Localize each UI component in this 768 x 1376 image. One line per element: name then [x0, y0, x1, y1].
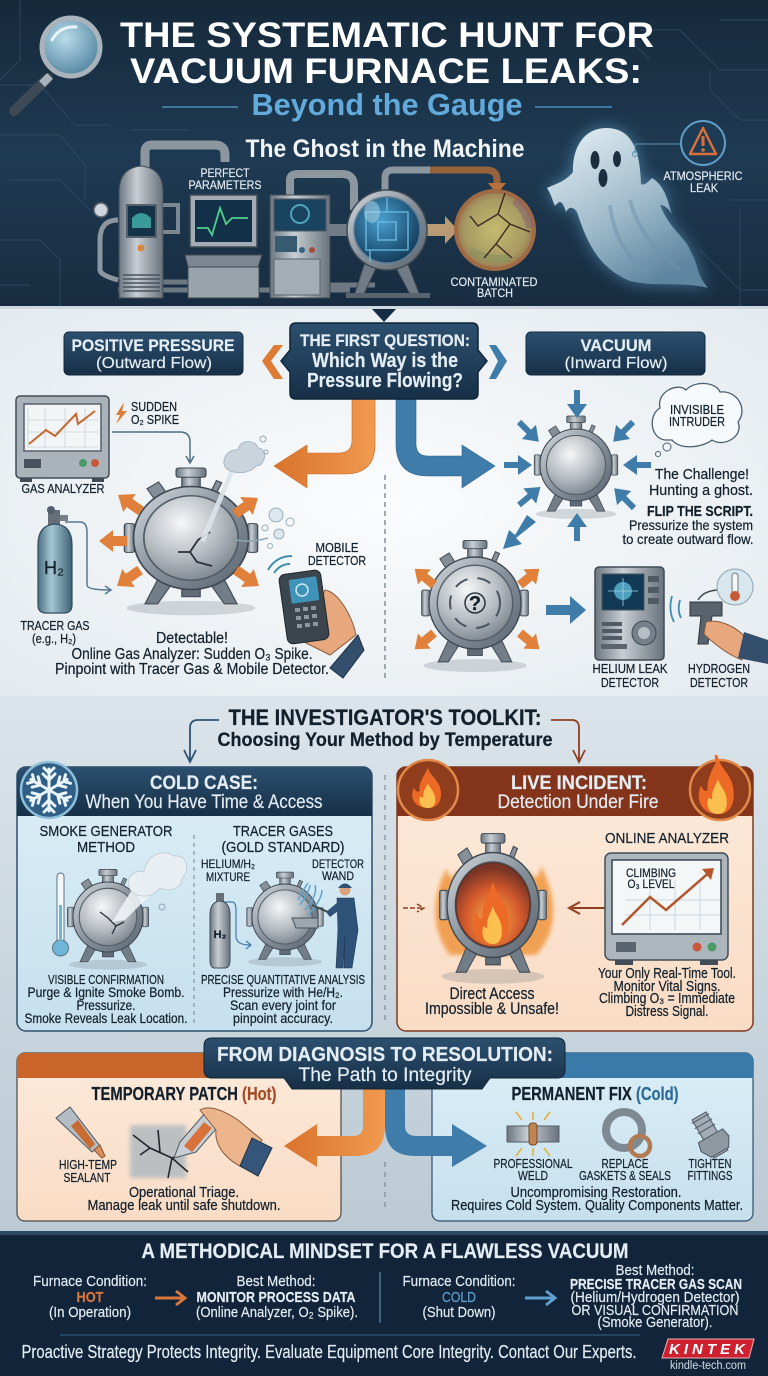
heading: permanent fix: PERMANENT FIX (Cold) [512, 1084, 678, 1104]
text block: hot condition: Furnace Condition: [33, 1273, 147, 1290]
icon: gasket [606, 1112, 650, 1156]
illustration: online analyzer monitor: O₃ LEVEL [628, 877, 675, 891]
subheading: smoke generator method: METHOD [77, 839, 135, 856]
illustration: leaking furnace [124, 436, 294, 615]
panel: header [0, 0, 768, 310]
callout: invisible intruder cloud: INTRUDER [669, 415, 725, 429]
illustration: furnace under vacuum [534, 416, 618, 519]
subtitle: Beyond the Gauge [252, 87, 522, 122]
label: mobile detector: MOBILE [316, 541, 358, 555]
text block: real-time tool: Climbing O₃ = Immediate [599, 991, 735, 1007]
label: helium leak detector: HELIUM LEAK [592, 662, 668, 676]
text block: detectable: Online Gas Analyzer: Sudden O₃ Spike. [72, 646, 312, 663]
arrow: analyzer to furnace [569, 902, 605, 914]
title: THE SYSTEMATIC HUNT FOR [120, 16, 654, 55]
illustration: pressurized furnace: ? [469, 593, 481, 615]
label: contaminated batch: CONTAMINATED [450, 275, 538, 289]
heading: cold case: When You Have Time & Access [86, 792, 322, 813]
text block: hot best method: MONITOR PROCESS DATA [196, 1289, 356, 1306]
illustration: pressurized furnace [422, 540, 528, 672]
heading: investigator's toolkit [218, 705, 552, 751]
label: mobile detector [308, 541, 366, 568]
heading: online analyzer: ONLINE ANALYZER [605, 830, 729, 847]
label: gaskets and seals: GASKETS & SEALS [579, 1169, 671, 1183]
heading: cold case [86, 773, 322, 813]
icon: mobile detector in hand [268, 556, 364, 678]
text block: visible confirmation: VISIBLE CONFIRMATION [48, 973, 164, 987]
text block: direct access: Impossible & Unsafe! [425, 999, 559, 1018]
label: perfect parameters: PARAMETERS [188, 178, 262, 192]
callout: the first question: THE FIRST QUESTION: [300, 331, 470, 350]
label: tighten fittings: FITTINGS [688, 1169, 732, 1183]
arrow: cold to method [525, 1291, 555, 1305]
arrow: blue flow to vacuum [396, 398, 495, 488]
text block: operational triage [88, 1185, 280, 1214]
label: sudden O2 spike [131, 400, 179, 427]
arrows: inward flow [504, 390, 651, 541]
arrow: blue to permanent fix [385, 1089, 487, 1167]
heading: investigator's toolkit: Choosing Your Method by Temperature [218, 730, 552, 751]
heading: from diagnosis to resolution [204, 1038, 565, 1089]
icon: bolt [685, 1108, 735, 1162]
label: high-temp sealant: SEALANT [64, 1171, 111, 1185]
text block: visible confirmation [24, 973, 188, 1026]
heading: live incident [498, 773, 658, 813]
text block: hot best method: Best Method: [236, 1273, 316, 1290]
callout: the first question: Pressure Flowing? [307, 370, 463, 392]
heading: investigator's toolkit: THE INVESTIGATOR'S TOOLKIT: [228, 705, 542, 730]
logo: kintek: KINTEK [669, 1341, 746, 1358]
label: atmospheric leak [664, 169, 743, 195]
label: detector wand [312, 857, 364, 883]
text block: cold best method: (Helium/Hydrogen Detector) [570, 1289, 740, 1306]
text block: hot best method: (Online Analyzer, O₂ Spike). [196, 1304, 358, 1321]
text block: precise quantitative analysis: pinpoint accuracy. [233, 1010, 333, 1026]
icon: right flame badge [690, 755, 750, 820]
illustration: online analyzer monitor [605, 853, 728, 965]
label: helium leak detector [592, 662, 668, 690]
text block: flip the script [622, 466, 754, 547]
text block: detectable [55, 630, 329, 678]
text block: flip the script: The Challenge! [655, 466, 749, 483]
text block: detectable: Pinpoint with Tracer Gas & Mobile Detector. [55, 661, 329, 678]
panel: live incident [397, 755, 753, 1031]
illustration: hydrogen detector gun [670, 569, 768, 664]
label: gaskets and seals: REPLACE [602, 1157, 648, 1171]
label: detector wand: DETECTOR [312, 857, 364, 871]
label: high-temp sealant [59, 1158, 117, 1185]
label: tighten fittings: TIGHTEN [688, 1157, 732, 1171]
text block: cold condition: COLD [442, 1289, 476, 1306]
heading: live incident: Detection Under Fire [498, 792, 658, 813]
label: contaminated batch [450, 275, 538, 300]
text block: operational triage: Manage leak until safe shutdown. [88, 1198, 280, 1214]
arrow: vacuum furnace to pressurized furnace [503, 515, 536, 549]
icon: magnifying glass [14, 18, 100, 111]
subheading: tracer gases: (GOLD STANDARD) [222, 839, 345, 856]
heading: live incident: LIVE INCIDENT: [511, 773, 647, 794]
callout: the first question: Which Way is the [312, 350, 458, 372]
arrow: to cold case [184, 720, 219, 762]
text block: cold condition: (Shut Down) [422, 1304, 496, 1321]
heading: from diagnosis to resolution: The Path to Integrity [298, 1065, 472, 1086]
illustration: furnace machinery [94, 145, 506, 298]
callout: the first question [281, 323, 487, 399]
text block: cold condition: Furnace Condition: [402, 1273, 516, 1290]
text block: flip the script: to create outward flow. [622, 531, 754, 547]
label box: vacuum: (Inward Flow) [564, 355, 668, 372]
text block: cold best method: OR VISUAL CONFIRMATION [572, 1302, 738, 1319]
illustration: tracer gas cylinder: H₂ [44, 558, 64, 578]
icon: lightning bolt [116, 402, 127, 424]
label: perfect parameters [188, 166, 262, 192]
icon: snowflake [21, 762, 77, 818]
arrow: orange chevron [262, 345, 283, 379]
text block: real-time tool [598, 966, 736, 1020]
text block: direct access [425, 984, 559, 1018]
text block: visible confirmation: Smoke Reveals Leak Location. [24, 1010, 188, 1026]
text block: operational triage: Operational Triage. [129, 1185, 239, 1201]
label: sudden O2 spike: SUDDEN [131, 400, 177, 414]
arrow: orange flow to positive pressure [274, 398, 375, 488]
illustration: furnace on fire [435, 834, 553, 984]
text block: precise quantitative analysis: PRECISE QUANTITATIVE ANALYSIS [201, 973, 365, 987]
icon: left flame badge [398, 760, 458, 820]
text block: uncompromising restoration [451, 1185, 743, 1214]
label: hydrogen detector: HYDROGEN [688, 662, 750, 676]
label: tracer gas: (e.g., H₂) [32, 632, 76, 646]
label: gas analyzer: GAS ANALYZER [22, 482, 104, 496]
label box: vacuum: VACUUM [580, 336, 652, 355]
label: gaskets and seals [579, 1157, 671, 1183]
label: professional weld: WELD [518, 1169, 548, 1183]
label: hydrogen detector [688, 662, 750, 690]
text block: real-time tool: Monitor Vital Signs. [614, 979, 720, 995]
title [120, 16, 654, 91]
arrow: hot to method [155, 1291, 185, 1305]
text block: hot best method [196, 1273, 358, 1321]
logo: kintek: kindle-tech.com [670, 1360, 746, 1372]
heading: cold case: COLD CASE: [150, 773, 258, 794]
illustration: contaminated batch disc [456, 191, 534, 269]
heading: from diagnosis to resolution: FROM DIAGNOSIS TO RESOLUTION: [217, 1044, 553, 1066]
heading: temporary patch: TEMPORARY PATCH (Hot) [92, 1084, 276, 1104]
label: mobile detector: DETECTOR [308, 554, 366, 568]
text block: visible confirmation: Pressurize. [76, 997, 136, 1013]
illustration: ghost [547, 128, 708, 288]
label box: vacuum [526, 332, 705, 375]
illustration: helium leak detector [595, 567, 664, 660]
text block: precise quantitative analysis: Scan every joint for [230, 997, 336, 1013]
label: perfect parameters: PERFECT [200, 166, 250, 180]
label: hydrogen detector: DETECTOR [690, 676, 748, 690]
label: tracer gas [20, 619, 90, 646]
text block: direct access: Direct Access [450, 984, 534, 1003]
arrow: to live incident [551, 720, 585, 762]
text block: cold best method: (Smoke Generator). [598, 1314, 712, 1331]
text block: precise quantitative analysis: Pressurize with He/H₂. [223, 984, 343, 1000]
label: helium leak detector: DETECTOR [601, 676, 659, 690]
text block: flip the script: Pressurize the system [629, 517, 753, 533]
arrow: blocked access [403, 904, 424, 912]
text block: hot condition: HOT [76, 1289, 104, 1306]
label: tracer gas: TRACER GAS [20, 619, 90, 633]
label box: positive pressure [64, 332, 243, 375]
text block: visible confirmation: Purge & Ignite Smoke Bomb. [28, 984, 184, 1000]
panel: cold case [17, 762, 372, 1031]
label: high-temp sealant: HIGH-TEMP [59, 1158, 117, 1172]
text block: precise quantitative analysis [201, 973, 365, 1026]
subheading: tracer gases: TRACER GASES [233, 823, 333, 840]
label: atmospheric leak: LEAK [690, 181, 718, 195]
label: helium/H2 mixture: MIXTURE [206, 870, 250, 884]
text block: call to action: Proactive Strategy Protects Integrity. Evaluate Equipment Core Integrity. Contact Our Experts. [22, 1342, 636, 1362]
callout: invisible intruder cloud [652, 383, 742, 456]
label: helium/H2 mixture [201, 857, 255, 884]
illustration: tracer gas furnace with technician: H₂ [214, 929, 227, 941]
label: helium/H2 mixture: HELIUM/H₂ [201, 857, 255, 871]
illustration: gas analyzer [16, 396, 109, 482]
label box: positive pressure: (Outward Flow) [96, 355, 212, 372]
panel: the investigator's toolkit [0, 696, 768, 1231]
label: detector wand: WAND [322, 869, 354, 883]
icon: warning badge [632, 121, 725, 165]
callout: invisible intruder cloud: INVISIBLE [670, 403, 724, 417]
label: atmospheric leak: ATMOSPHERIC [664, 169, 743, 183]
subheading: smoke generator method: SMOKE GENERATOR [40, 823, 173, 840]
arrows: outward flow [99, 486, 265, 595]
arrow: analyzer to furnace [112, 432, 194, 463]
text block: real-time tool: Your Only Real-Time Tool. [598, 966, 736, 982]
label: tighten fittings [688, 1157, 732, 1183]
illustration: online analyzer monitor: CLIMBING [626, 866, 676, 880]
label box: positive pressure: POSITIVE PRESSURE [72, 336, 234, 355]
subheading: tracer gases [222, 823, 345, 856]
text block: hot condition: (In Operation) [49, 1304, 131, 1321]
heading: the ghost in the machine: The Ghost in the Machine [246, 135, 525, 163]
label: contaminated batch: BATCH [477, 286, 513, 300]
label: professional weld: PROFESSIONAL [494, 1157, 573, 1171]
text block: cold best method: Best Method: [616, 1262, 694, 1279]
text block: cold condition [402, 1273, 516, 1321]
illustration: crack and sealant application [130, 1108, 272, 1178]
illustration: smoke test furnace [52, 853, 187, 970]
text block: uncompromising restoration: Uncompromising Restoration. [510, 1185, 682, 1201]
text block: real-time tool: Distress Signal. [626, 1004, 708, 1020]
text block: flip the script: Hunting a ghost. [649, 482, 753, 499]
logo: kintek [662, 1339, 754, 1372]
subheading: smoke generator method [40, 823, 173, 856]
text block: cold best method [570, 1262, 742, 1331]
panel: methodical mindset footer [0, 1231, 768, 1376]
label: professional weld [494, 1157, 573, 1183]
label: sudden O2 spike: O₂ SPIKE [131, 413, 179, 427]
panel: permanent fix [432, 1053, 753, 1221]
text block: hot condition [33, 1273, 147, 1321]
illustration: tracer gas furnace with technician [210, 872, 358, 968]
arrow: orange to temporary patch [284, 1089, 385, 1167]
icon: sealant tube [56, 1107, 105, 1158]
panel: temporary patch [17, 1053, 341, 1221]
arrow: to detectors [546, 596, 586, 624]
icon: weld [507, 1112, 559, 1156]
illustration: tracer gas cylinder [38, 506, 111, 613]
title: VACUUM FURNACE LEAKS: [130, 52, 642, 91]
panel: the first question [0, 306, 768, 698]
arrows: pressurized outward flow [408, 561, 546, 657]
text block: detectable: Detectable! [156, 630, 228, 647]
arrow: blue chevron [489, 345, 507, 379]
heading: methodical mindset: A METHODICAL MINDSET FOR A FLAWLESS VACUUM [142, 1240, 628, 1263]
